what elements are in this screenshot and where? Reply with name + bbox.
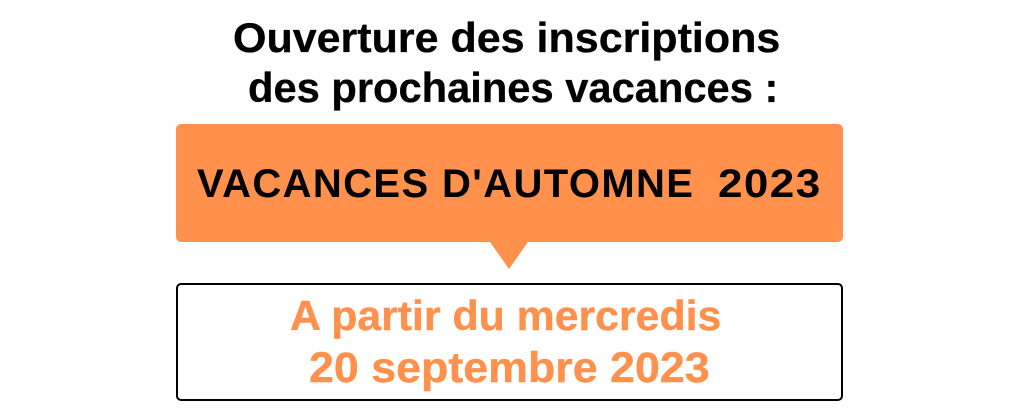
date text	[290, 292, 721, 392]
date text: 20 septembre 2023	[309, 344, 710, 392]
banner text: 2023	[718, 162, 822, 206]
title: des prochaines vacances :	[248, 64, 778, 111]
banner text: VACANCES D'AUTOMNE	[197, 162, 694, 206]
title: Ouverture des inscriptions	[233, 14, 780, 61]
banner pointer	[490, 242, 528, 269]
date box	[176, 283, 843, 401]
banner box	[176, 124, 843, 242]
orange callout banner	[176, 124, 843, 269]
date text: A partir du mercredis	[290, 292, 721, 339]
title	[233, 14, 780, 111]
